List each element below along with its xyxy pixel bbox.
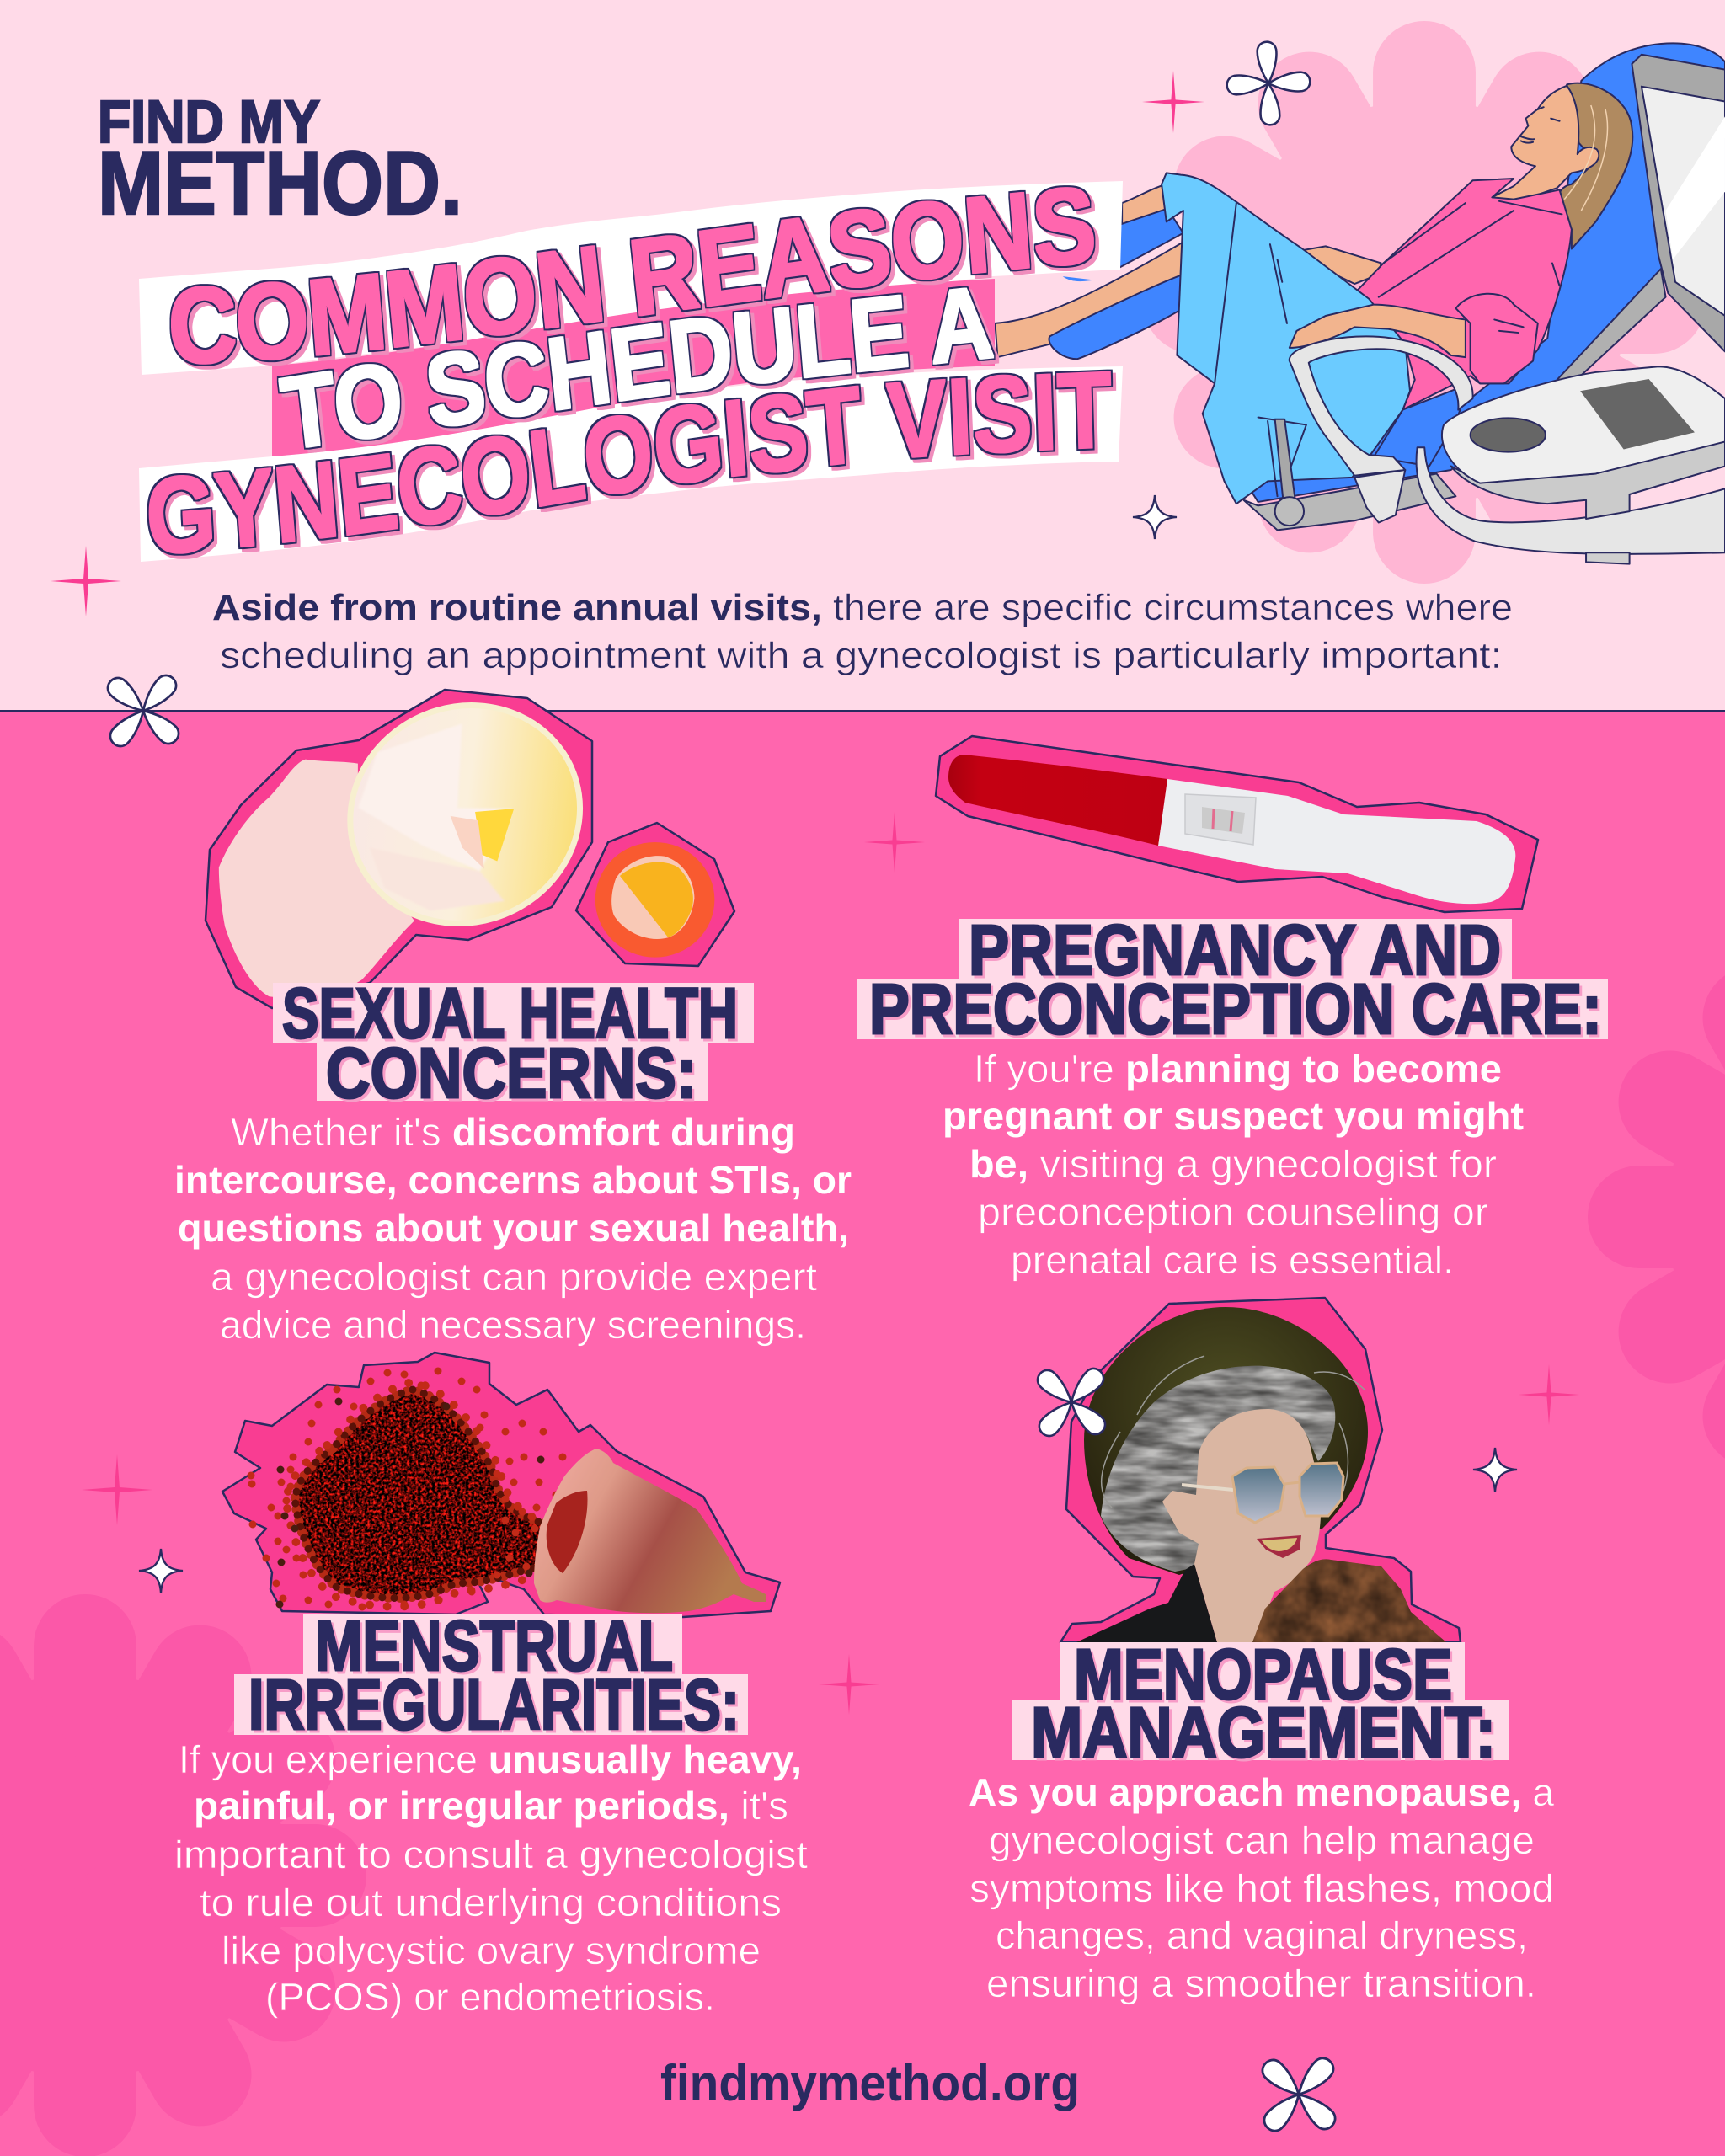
logo [98, 89, 462, 233]
heading: pregnancy and preconception care: PREGNANCY AND [969, 910, 1501, 990]
text: pregnancy and preconception care: be, visiting a gynecologist for [969, 1142, 1497, 1186]
heading: menopause management [1012, 1635, 1509, 1772]
heading: menstrual irregularities: IRREGULARITIES: [248, 1665, 740, 1744]
background flower: header [1143, 21, 1706, 584]
text: menopause management: gynecologist can help manage [989, 1818, 1535, 1862]
text: pregnancy and preconception care: pregnant or suspect you might [943, 1094, 1524, 1138]
text: menopause management: ensuring a smoother transition. [986, 1961, 1536, 2005]
background flower: right [1588, 936, 1725, 1498]
title line 3: GYNECOLOGIST VISIT [147, 369, 1117, 559]
text: menstrual irregularities [174, 1737, 808, 2019]
sticker: pregnancy test photo [936, 736, 1538, 912]
text: sexual health concerns: Whether it's discomfort during [231, 1110, 795, 1154]
sticker: menstrual cup and beads photo [222, 1353, 780, 1617]
text: menstrual irregularities: to rule out underlying conditions [200, 1881, 782, 1924]
text: sexual health concerns: questions about your sexual health, [178, 1206, 849, 1250]
heading: menopause management: MENOPAUSE [1074, 1635, 1452, 1714]
text: menopause management [969, 1770, 1554, 2005]
heading: sexual health concerns: CONCERNS: [326, 1033, 697, 1113]
sticker: condoms photo [206, 690, 734, 1008]
logo: FIND MY [98, 89, 320, 156]
title line 1: COMMON REASONS [170, 185, 1099, 370]
text: sexual health concerns: a gynecologist can provide expert [211, 1255, 817, 1299]
title band: line 3 [139, 366, 1123, 562]
text: menstrual irregularities: If you experience unusually heavy, [179, 1737, 802, 1781]
text: menstrual irregularities: painful, or irregular periods, it's [194, 1784, 788, 1828]
text: pregnancy and preconception care: prenatal care is essential. [1011, 1238, 1454, 1282]
title [139, 181, 1123, 562]
sticker: portrait of older woman photo [1060, 1298, 1461, 1642]
intro text: scheduling an appointment with a gynecologist is particularly important: [220, 635, 1502, 676]
text: menstrual irregularities: like polycystic ovary syndrome [222, 1929, 761, 1972]
text: menstrual irregularities: important to consult a gynecologist [174, 1833, 808, 1876]
heading: pregnancy and preconception care [857, 910, 1608, 1049]
website url: findmymethod.org [660, 2055, 1080, 2111]
heading: menstrual irregularities: MENSTRUAL [315, 1606, 673, 1685]
heading: sexual health concerns [273, 974, 754, 1113]
intro text: Aside from routine annual visits, there are specific circumstances where [212, 587, 1513, 628]
title line 2: TO SCHEDULE A [276, 286, 999, 453]
decorative sparkles [51, 71, 1579, 1715]
panel: top header background [0, 0, 1725, 712]
text: menopause management: changes, and vaginal dryness, [996, 1913, 1528, 1957]
text: sexual health concerns: intercourse, concerns about STIs, or [174, 1158, 852, 1202]
heading: menstrual irregularities [234, 1606, 748, 1744]
decorative white petals crosses [81, 40, 1364, 2156]
text: pregnancy and preconception care [943, 1047, 1524, 1282]
text: pregnancy and preconception care: If you're planning to become [974, 1047, 1502, 1091]
title band: line 1 [139, 181, 1123, 375]
text: sexual health concerns: advice and necessary screenings. [220, 1303, 806, 1347]
text: menopause management: symptoms like hot flashes, mood [969, 1866, 1554, 1910]
background flower: bottom left [0, 1594, 366, 2156]
text: pregnancy and preconception care: preconception counseling or [978, 1190, 1488, 1234]
text: sexual health concerns [174, 1110, 852, 1347]
text: menstrual irregularities: (PCOS) or endometriosis. [265, 1975, 715, 2019]
illustration: woman in gynecological exam chair [995, 43, 1725, 564]
intro text [212, 587, 1513, 676]
heading: sexual health concerns: SEXUAL HEALTH [282, 974, 738, 1053]
text: menopause management: As you approach menopause, a [969, 1770, 1554, 1814]
heading: menopause management: MANAGEMENT: [1031, 1693, 1496, 1772]
heading: pregnancy and preconception care: PRECONCEPTION CARE: [869, 969, 1602, 1049]
title band: line 2 [272, 279, 995, 456]
decorative white stars [139, 495, 1517, 1593]
panel: main pink background [0, 712, 1725, 2156]
logo: METHOD. [98, 132, 462, 233]
divider line [0, 710, 1725, 712]
